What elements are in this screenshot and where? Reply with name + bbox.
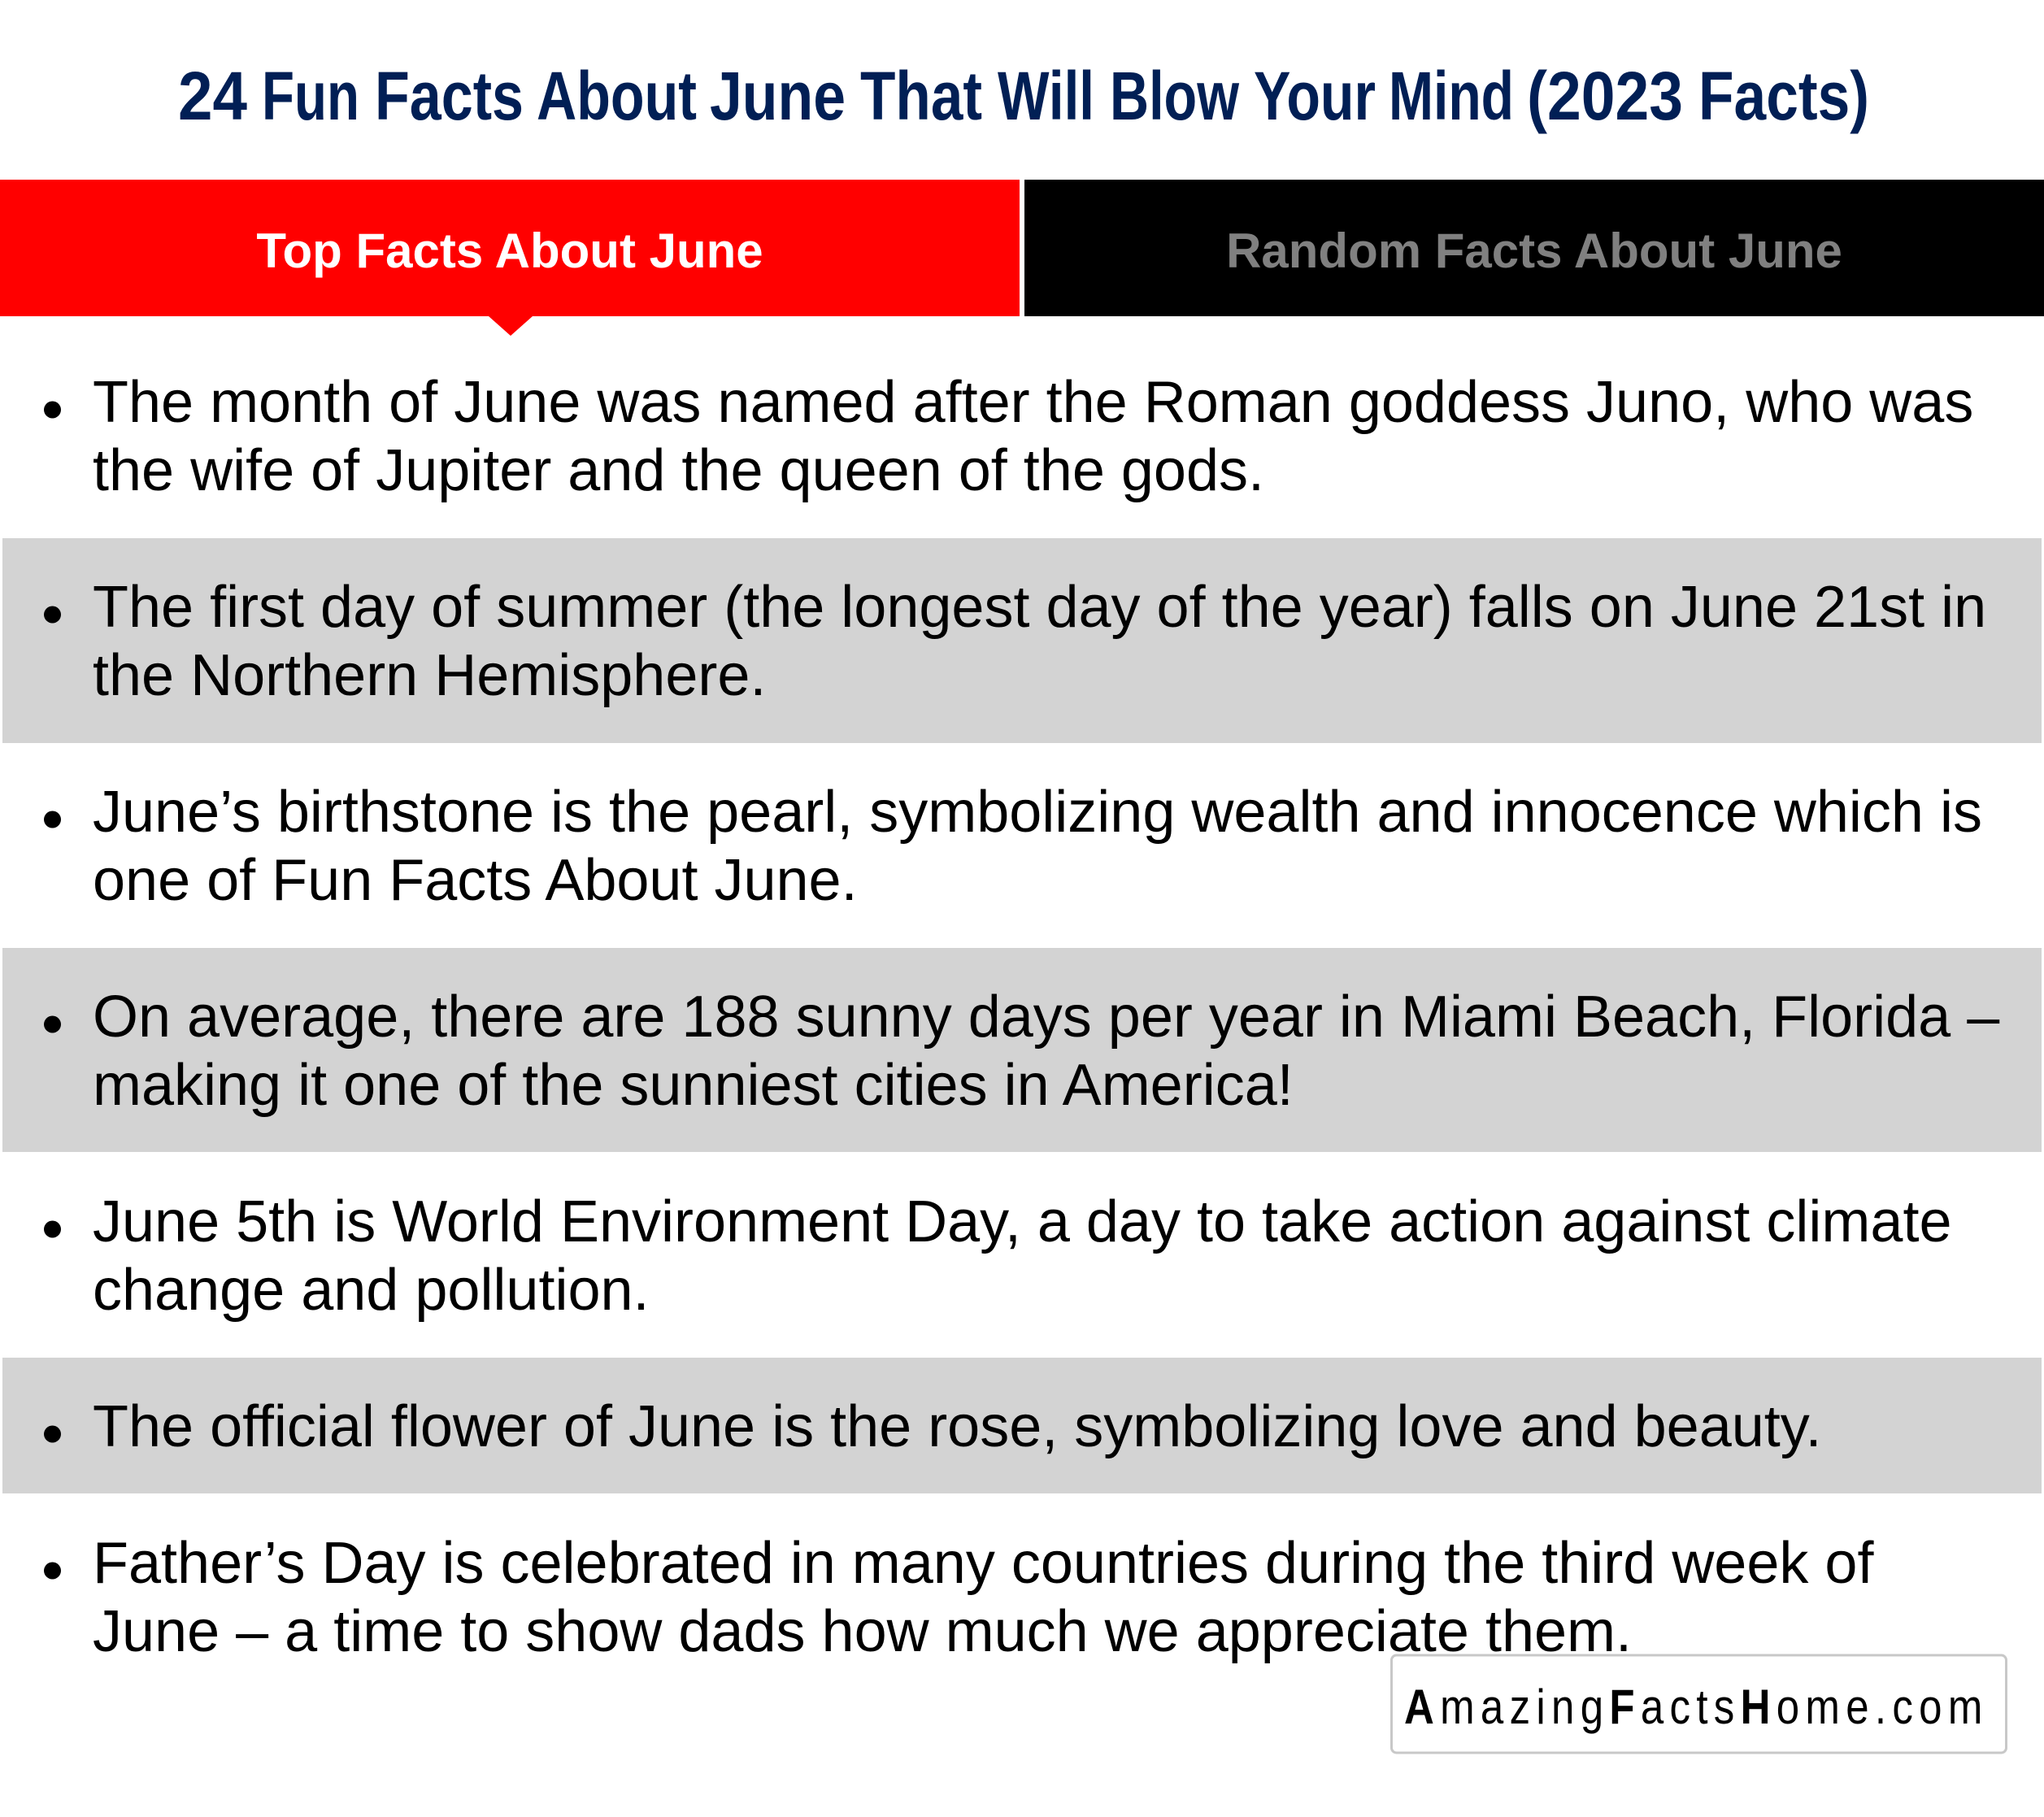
inactive tab: random facts xyxy=(1024,180,2044,316)
fact 2 row xyxy=(2,538,2042,743)
fact 5: change and pollution. xyxy=(93,1258,650,1323)
inactive tab: random facts: Random Facts About June xyxy=(1226,224,1842,278)
title: Your xyxy=(1254,58,1376,134)
title: Facts xyxy=(375,58,524,134)
fact 4 row xyxy=(2,948,2042,1152)
fact 2 row: The first day of summer (the longest day of the year) falls on June 21st in xyxy=(93,575,1986,640)
fact 3: one of Fun Facts About June. xyxy=(93,848,858,913)
fact 7: June – a time to show dads how much we appreciate them. xyxy=(93,1599,1632,1664)
title: Will xyxy=(998,58,1094,134)
title: About xyxy=(537,58,697,134)
fact 5: June 5th is World Environment Day, a day to take action against climate xyxy=(93,1189,1951,1254)
watermark box: AmazingFactsHome.com xyxy=(1404,1680,1989,1734)
fact 2 row: the Northern Hemisphere. xyxy=(93,643,766,708)
title: That xyxy=(860,58,982,134)
title: Facts) xyxy=(1698,58,1869,134)
fact 6 row: The official flower of June is the rose, symbolizing love and beauty. xyxy=(93,1394,1821,1459)
title: June xyxy=(710,58,846,134)
active tab: top facts xyxy=(0,180,1020,336)
fact 1: the wife of Jupiter and the queen of the gods. xyxy=(93,438,1264,503)
title: (2023 xyxy=(1527,58,1683,134)
fact 1: The month of June was named after the Roman goddess Juno, who was xyxy=(93,370,1973,435)
fact 1 xyxy=(44,370,1973,503)
fact 5 xyxy=(44,1189,1951,1323)
title: Mind xyxy=(1389,58,1514,134)
watermark box xyxy=(1392,1655,2007,1753)
fact 4 row: On average, there are 188 sunny days per year in Miami Beach, Florida – xyxy=(93,985,2000,1050)
fact 7: Father’s Day is celebrated in many countries during the third week of xyxy=(93,1531,1874,1596)
fact 3 xyxy=(44,780,1982,913)
fact 7 xyxy=(44,1531,1874,1664)
title: 24 xyxy=(178,58,247,134)
fact 3: June’s birthstone is the pearl, symbolizing wealth and innocence which is xyxy=(93,780,1982,845)
title: Fun xyxy=(262,58,359,134)
fact 6 row xyxy=(2,1358,2042,1493)
fact 4 row: making it one of the sunniest cities in America! xyxy=(93,1053,1294,1118)
active tab: top facts: Top Facts About June xyxy=(256,224,763,278)
title: Blow xyxy=(1110,58,1240,134)
